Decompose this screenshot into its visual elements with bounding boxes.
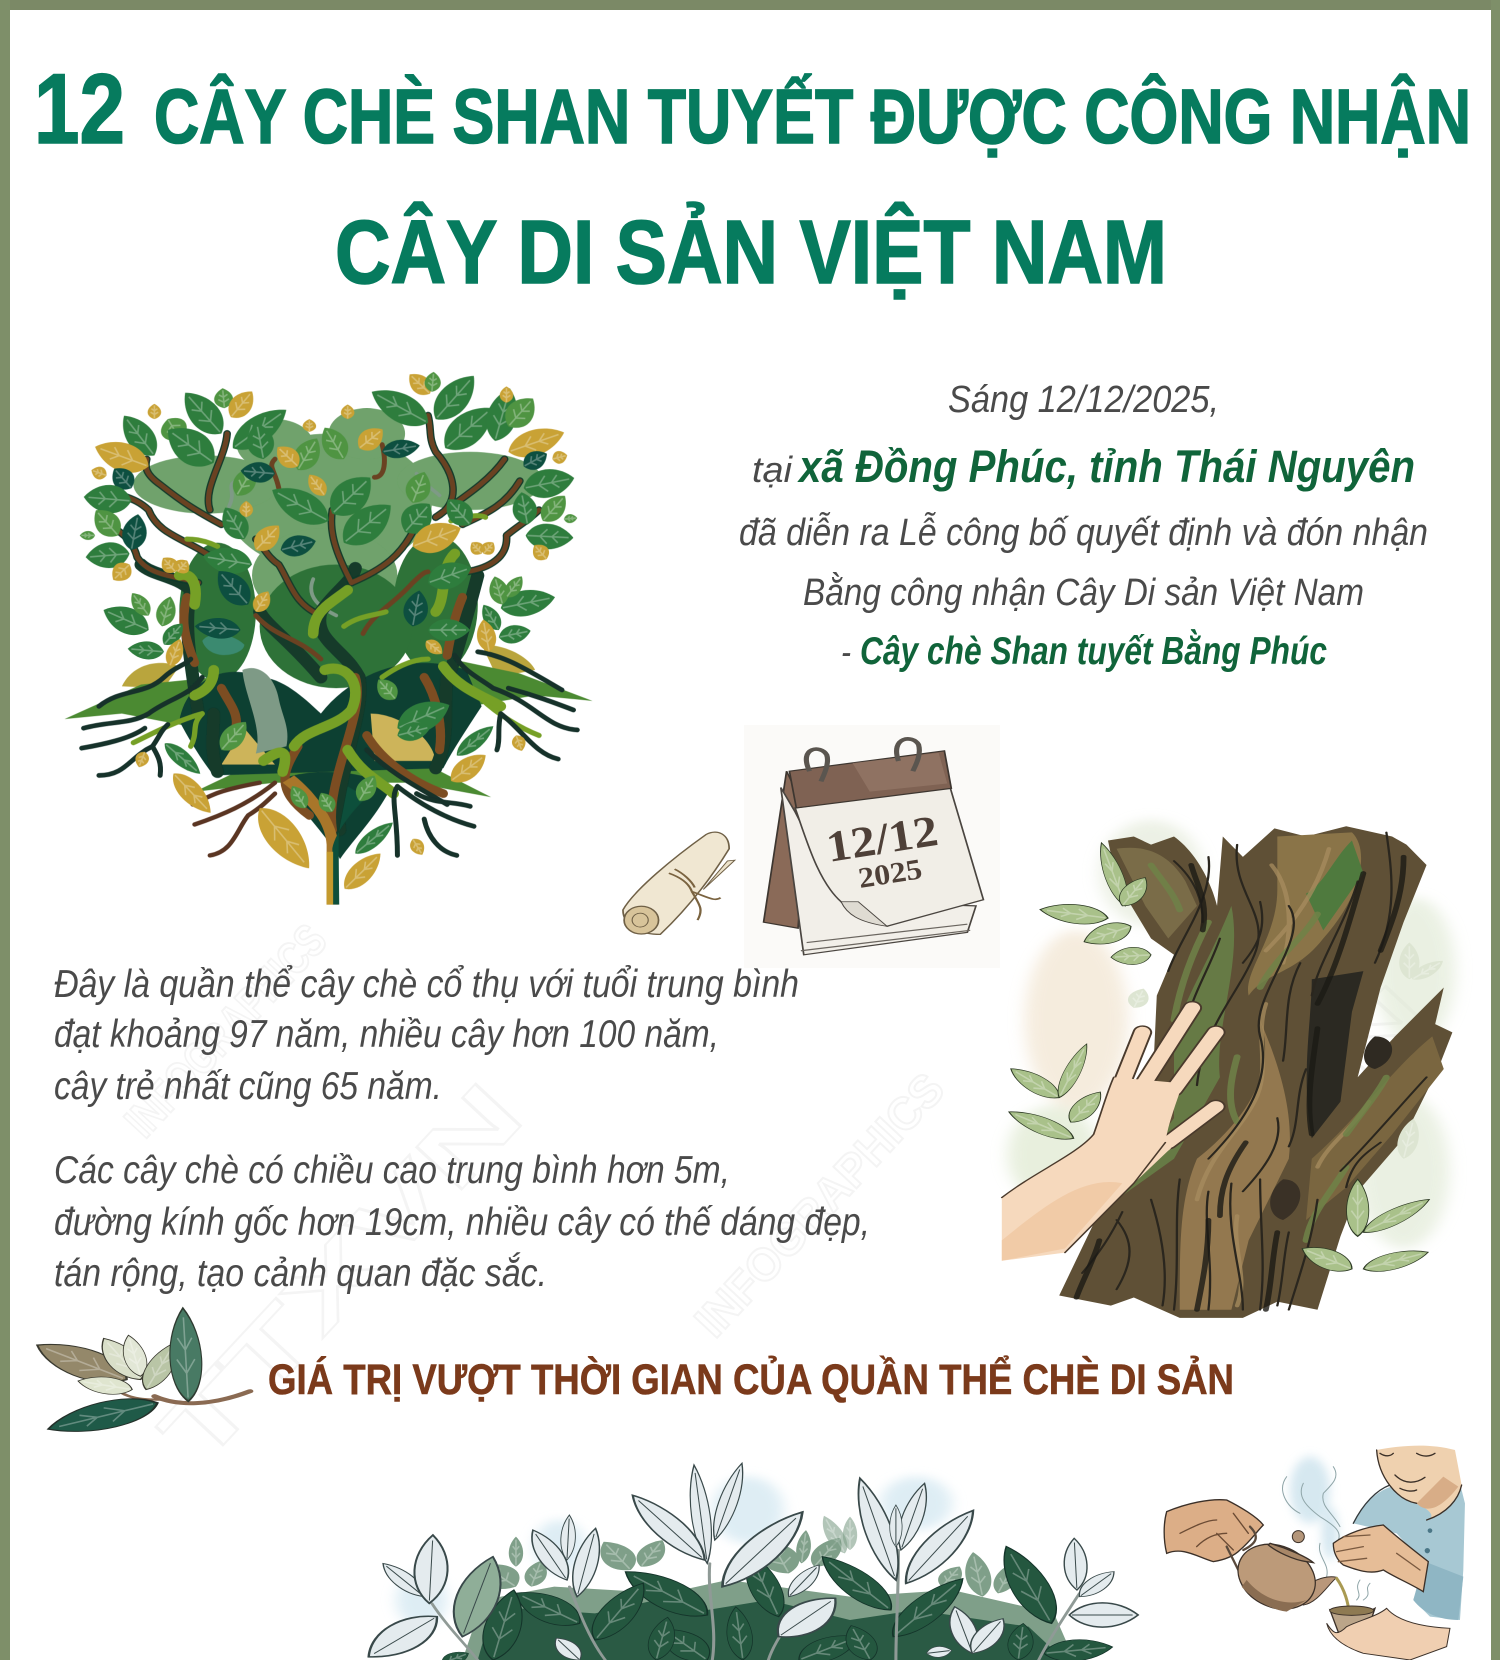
- leaves: [1003, 841, 1435, 1277]
- text block: tree size: đường kính gốc hơn 19cm, nhiều cây có thế dáng đẹp,: [54, 1201, 870, 1244]
- moss: [133, 516, 539, 794]
- text block: tree age: Đây là quần thể cây chè cổ thụ với tuổi trung bình: [54, 963, 799, 1006]
- section heading: GIÁ TRỊ VƯỢT THỜI GIAN CỦA QUẦN THỂ CHÈ DI SẢN: [268, 1355, 1234, 1404]
- icon: tea leaf sprig: [25, 1308, 250, 1441]
- text block: announcement: Bằng công nhận Cây Di sản Việt Nam: [803, 571, 1364, 614]
- title: 12: [34, 53, 125, 164]
- text block: announcement: đã diễn ra Lễ công bố quyết định và đón nhận: [739, 510, 1428, 554]
- hand: [1119, 1008, 1216, 1142]
- text block: tree age: cây trẻ nhất cũng 65 năm.: [54, 1065, 442, 1108]
- icon: calendar 12/12/2025: 12/12: [823, 806, 941, 872]
- stem: [283, 775, 338, 904]
- text block: tree size: [54, 1149, 870, 1295]
- text: TTXVN: [1094, 970, 1437, 1330]
- illustration: hand on ancient trunk: [1002, 820, 1455, 1318]
- canopy backing: [133, 408, 543, 623]
- text block: announcement: xã Đồng Phúc, tỉnh Thái Nguyên: [797, 441, 1415, 492]
- title: [34, 53, 1471, 303]
- illustration: heart-shaped ancient tea tree: [64, 367, 593, 904]
- title: CÂY DI SẢN VIỆT NAM: [335, 201, 1167, 303]
- pale background tree: [242, 668, 287, 754]
- text: INFOGRAPHICS: [114, 914, 336, 1147]
- text block: announcement: Sáng 12/12/2025,: [948, 379, 1219, 421]
- bark texture: [1197, 849, 1369, 1306]
- text block: announcement: -: [841, 631, 851, 672]
- leaves: [174, 384, 233, 443]
- icon: calendar 12/12/2025: [744, 725, 1000, 968]
- icon: calendar 12/12/2025: 2025: [856, 853, 924, 895]
- text block: tree size: Các cây chè có chiều cao trung bình hơn 5m,: [54, 1149, 730, 1192]
- roots: [82, 652, 577, 855]
- text: TTXVN: [141, 1064, 542, 1484]
- illustration: elder pouring tea: [1164, 1446, 1465, 1660]
- text block: tree size: tán rộng, tạo cảnh quan đặc sắc.: [54, 1252, 547, 1295]
- text block: tree age: đạt khoảng 97 năm, nhiều cây hơn 100 năm,: [54, 1013, 719, 1056]
- text block: announcement: Cây chè Shan tuyết Bằng Phúc: [860, 629, 1327, 673]
- text block: announcement: tại: [752, 449, 793, 490]
- icon: rolled scroll: [623, 832, 735, 934]
- branches: dark under-stroke: [141, 565, 478, 830]
- illustration: tea bush: [355, 1462, 1138, 1660]
- text block: announcement: [739, 379, 1428, 673]
- text block: tree age: [54, 963, 799, 1108]
- dark masses around trunks: [179, 535, 478, 688]
- text: INFOGRAPHICS: [684, 1063, 954, 1347]
